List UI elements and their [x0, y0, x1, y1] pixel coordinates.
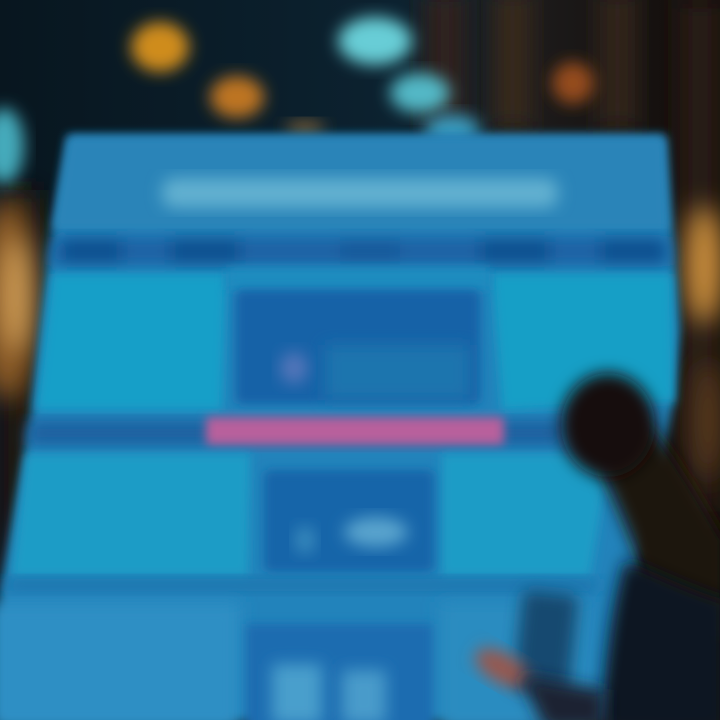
person: silhouette — [469, 373, 720, 720]
forearm — [520, 675, 605, 720]
hand — [469, 640, 535, 696]
left warm glow — [0, 200, 38, 400]
light: cyan 2 — [390, 73, 450, 113]
person body — [600, 560, 720, 720]
cyan card: lower right — [442, 454, 610, 576]
light: orange 2 — [210, 76, 264, 118]
chart panel: lower centre — [264, 470, 434, 572]
chart panel: upper centre — [236, 290, 480, 404]
lower right panel — [440, 602, 590, 720]
person hair back — [600, 400, 720, 640]
lower row panel — [0, 602, 240, 720]
light: orange 1 — [131, 22, 189, 72]
light: orange 4 — [285, 121, 325, 135]
phone — [513, 589, 579, 695]
light: cyan 3 — [424, 114, 480, 146]
chart panel: bottom centre — [246, 624, 434, 720]
cyan card: upper left — [36, 274, 226, 410]
light: orange 3 — [552, 62, 594, 104]
heading: blurred title — [162, 178, 558, 208]
right warm glow — [684, 205, 720, 480]
cyan strip: upper middle — [226, 268, 490, 290]
light: cyan left — [0, 108, 24, 184]
cyan card: upper right — [492, 274, 674, 410]
panel: display board — [0, 135, 680, 720]
header band — [52, 137, 668, 230]
cyan card: lower left — [12, 454, 250, 576]
dark band: middle — [26, 421, 565, 445]
board base — [0, 135, 680, 720]
person head — [561, 373, 655, 477]
ceiling lights — [0, 17, 594, 184]
light: cyan 1 — [338, 17, 412, 65]
highlight bar: pink — [206, 417, 504, 445]
dark band: lower — [4, 578, 600, 592]
dark divider band — [50, 237, 670, 265]
